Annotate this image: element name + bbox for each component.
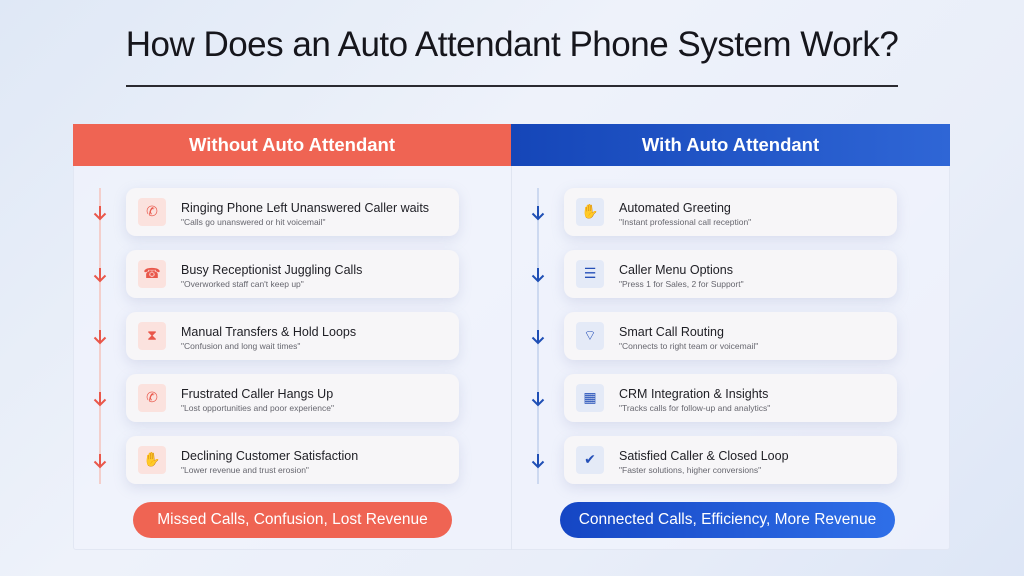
card: caller menu: "Press 1 for Sales, 2 for Support" <box>619 279 744 289</box>
card: frustrated caller: "Lost opportunities and poor experience" <box>181 403 334 413</box>
arrow <box>94 392 106 406</box>
column: without <box>94 188 462 490</box>
arrow <box>532 206 544 220</box>
arrow <box>532 392 544 406</box>
card: manual transfers: "Confusion and long wait times" <box>181 341 300 351</box>
arrow <box>532 454 544 468</box>
arrow <box>94 454 106 468</box>
card: satisfied caller: Satisfied Caller & Closed Loop <box>619 449 789 463</box>
card: crm integration: ▦ <box>583 390 597 406</box>
card: frustrated caller <box>126 374 459 422</box>
card: satisfied caller <box>564 436 897 484</box>
arrow <box>94 268 106 282</box>
arrow <box>532 268 544 282</box>
card: busy receptionist: "Overworked staff can't keep up" <box>181 279 304 289</box>
card: manual transfers: ⧗ <box>147 328 157 344</box>
header: without: Without Auto Attendant <box>189 134 395 155</box>
card: satisfied caller: ✔ <box>584 452 596 468</box>
arrow <box>532 330 544 344</box>
card: declining satisfaction: "Lower revenue and trust erosion" <box>181 465 309 475</box>
card: frustrated caller: Frustrated Caller Hangs Up <box>181 387 333 401</box>
card: crm integration: "Tracks calls for follow-up and analytics" <box>619 403 770 413</box>
card: manual transfers <box>126 312 459 360</box>
card: ringing phone <box>126 188 459 236</box>
card: ringing phone: Ringing Phone Left Unanswered Caller waits <box>181 201 429 215</box>
arrow <box>94 330 106 344</box>
card: frustrated caller: ✆ <box>146 390 158 406</box>
card: caller menu: Caller Menu Options <box>619 263 733 277</box>
card: crm integration <box>564 374 897 422</box>
card: declining satisfaction <box>126 436 459 484</box>
card: automated greeting <box>564 188 897 236</box>
card: busy receptionist: ☎ <box>143 266 161 282</box>
pill: with result: Connected Calls, Efficiency, More Revenue <box>579 511 876 528</box>
card: ringing phone: "Calls go unanswered or hit voicemail" <box>181 217 325 227</box>
header: with <box>511 124 950 166</box>
pill: with result <box>560 502 895 538</box>
card: automated greeting: "Instant professional call reception" <box>619 217 751 227</box>
card: automated greeting: ✋ <box>581 204 599 220</box>
card: automated greeting: Automated Greeting <box>619 201 731 215</box>
title: How Does an Auto Attendant Phone System Work? <box>126 25 898 64</box>
header: without <box>73 124 511 166</box>
panel: comparison <box>73 124 950 550</box>
card: satisfied caller: "Faster solutions, higher conversions" <box>619 465 761 475</box>
card: declining satisfaction: ✋ <box>143 452 161 468</box>
card: caller menu: ☰ <box>584 266 596 282</box>
card: declining satisfaction: Declining Customer Satisfaction <box>181 449 358 463</box>
card: smart routing: Smart Call Routing <box>619 325 724 339</box>
card: crm integration: CRM Integration & Insights <box>619 387 768 401</box>
card: smart routing: "Connects to right team or voicemail" <box>619 341 758 351</box>
card: busy receptionist <box>126 250 459 298</box>
header: with: With Auto Attendant <box>642 134 819 155</box>
card: busy receptionist: Busy Receptionist Juggling Calls <box>181 263 362 277</box>
card: smart routing: ⌔ <box>583 328 597 344</box>
pill: without result <box>133 502 452 538</box>
card: caller menu <box>564 250 897 298</box>
arrow <box>94 206 106 220</box>
card: ringing phone: ✆ <box>146 204 158 220</box>
pill: without result: Missed Calls, Confusion, Lost Revenue <box>157 511 428 528</box>
card: smart routing <box>564 312 897 360</box>
card: manual transfers: Manual Transfers & Hold Loops <box>181 325 356 339</box>
